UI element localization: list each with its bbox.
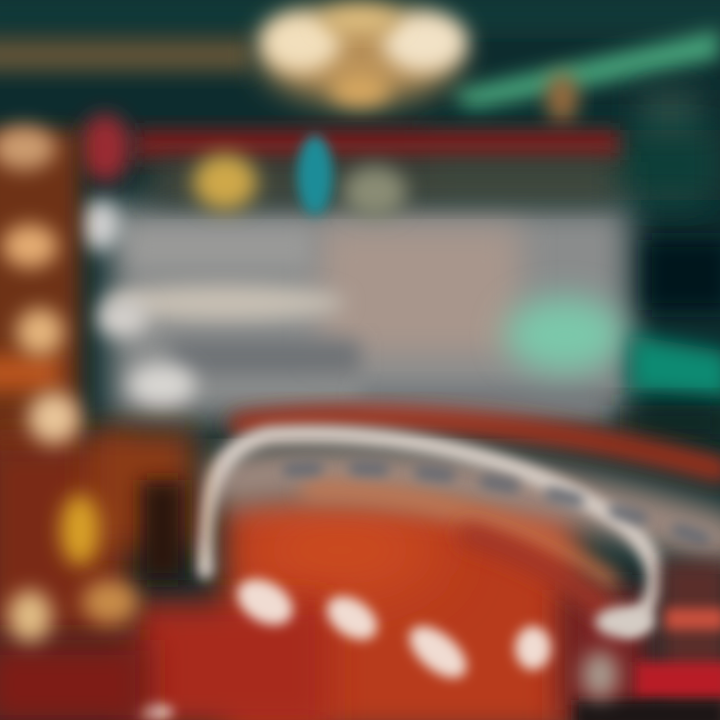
roulette table [130,495,650,720]
chandelier [260,6,578,124]
teal column [297,135,333,215]
ceiling: brown band and green light [0,0,720,200]
mint and teal glow on the right [505,240,720,440]
mid-room grey gaming area [78,199,630,420]
red banner [79,114,620,218]
wheel bottom right corner [575,560,720,720]
roulette wheel rim [204,418,720,625]
white betting markers [137,570,551,720]
left column with warm lights [0,126,195,720]
